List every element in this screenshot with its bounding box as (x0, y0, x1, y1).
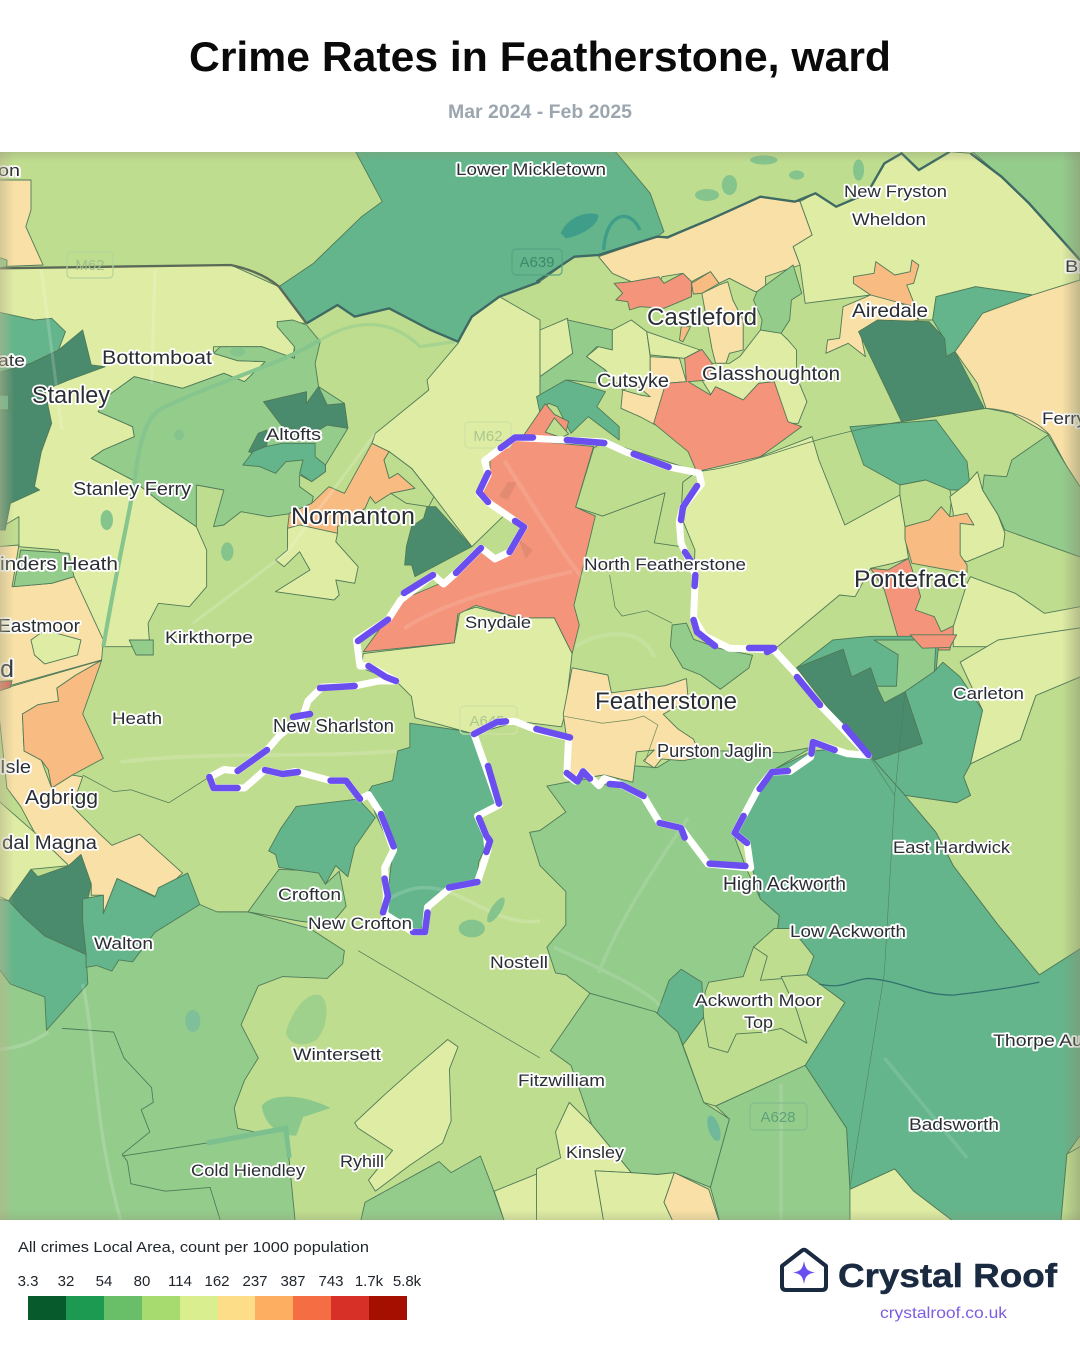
legend tick labels: 5.8k (393, 1273, 422, 1290)
place label: Agbrigg (25, 787, 98, 809)
legend tick labels: 743 (318, 1273, 344, 1290)
place label: Crofton (278, 885, 341, 904)
road shield: A628 (750, 1103, 807, 1130)
icon: house with sparkle (782, 1250, 826, 1290)
legend colour scale (28, 1296, 407, 1320)
road shield: M62 centre: M62 (473, 428, 503, 445)
place label: Ackworth Moor (695, 991, 822, 1010)
place label: Nostell (490, 953, 548, 972)
title: Crime Rates in Featherstone, ward (189, 33, 891, 80)
legend tick labels (18, 1273, 422, 1290)
place label: Wheldon (852, 210, 926, 229)
road shield: A639 (512, 249, 562, 275)
legend tick labels: 1.7k (355, 1273, 384, 1290)
place label: Fitzwilliam (518, 1071, 605, 1090)
place label: inders Heath (0, 554, 118, 574)
north-west map regions (0, 150, 664, 690)
place label: New Sharlston (273, 716, 394, 736)
place label: Stanley Ferry (73, 479, 191, 499)
road shield: M62 centre (465, 422, 511, 448)
north-east map regions (537, 150, 1080, 650)
place label: New Crofton (308, 914, 412, 933)
logo: Crystal Roof (782, 1250, 1058, 1322)
place label: New Fryston (844, 182, 947, 201)
legend title: All crimes Local Area, count per 1000 population (18, 1239, 369, 1256)
logo wordmark: Crystal Roof (838, 1257, 1058, 1294)
place label: Ryhill (340, 1152, 384, 1171)
south-east map regions (530, 625, 1080, 1232)
place label: East Hardwick (893, 838, 1011, 857)
place label: Top (744, 1013, 773, 1032)
place label: Isle (0, 757, 31, 777)
legend tick labels: 54 (96, 1273, 112, 1290)
place label: Snydale (465, 613, 531, 632)
place label: Cold Hiendley (191, 1161, 306, 1180)
place label: Eastmoor (0, 616, 80, 636)
legend tick labels: 237 (242, 1273, 268, 1290)
place label: Bottomboat (102, 348, 213, 369)
legend tick labels: 80 (134, 1273, 150, 1290)
logo url: crystalroof.co.uk (880, 1305, 1008, 1322)
place label: Wintersett (293, 1045, 381, 1064)
south-west map regions (0, 660, 551, 1232)
place label: Normanton (291, 503, 415, 530)
place label: Kinsley (566, 1143, 625, 1162)
road shield: A639: A639 (519, 254, 555, 271)
place label: Thorpe Au (993, 1031, 1080, 1050)
place label: dal Magna (2, 833, 97, 854)
map edge vignette (0, 152, 1080, 1220)
legend tick labels: 32 (58, 1273, 74, 1290)
place label: Stanley (32, 382, 110, 409)
road shield: A645: A645 (469, 713, 505, 730)
place label: Walton (94, 934, 153, 953)
place label: Purston Jaglin (657, 741, 772, 761)
place label: Badsworth (909, 1115, 999, 1134)
place label: Airedale (852, 301, 928, 322)
place label: North Featherstone (584, 555, 746, 574)
legend tick labels: 162 (204, 1273, 230, 1290)
place label: Glasshoughton (702, 364, 840, 385)
place label: Low Ackworth (790, 922, 906, 941)
subtitle: date range: Mar 2024 - Feb 2025 (448, 102, 632, 123)
place label: Kirkthorpe (165, 628, 253, 647)
place label: Heath (112, 709, 162, 728)
road shield: A645 (460, 706, 517, 734)
place label: Altofts (266, 425, 321, 444)
place label: Carleton (953, 684, 1024, 703)
legend (18, 1239, 422, 1320)
road shield: A628: A628 (760, 1109, 796, 1126)
place label: Featherstone (595, 688, 737, 715)
place label: Lower Mickletown (456, 160, 606, 179)
place label: Castleford (647, 304, 757, 331)
place label: Cutsyke (597, 371, 669, 392)
legend tick labels: 3.3 (18, 1273, 38, 1290)
place label: High Ackworth (723, 874, 846, 894)
legend tick labels: 387 (280, 1273, 306, 1290)
ward boundary: purple dashes (209, 438, 869, 932)
place label: Pontefract (854, 566, 966, 593)
road shield: M62 west: M62 (75, 257, 105, 274)
road shield: M62 west (67, 252, 113, 278)
Featherstone ward area (361, 404, 752, 782)
place label: d (0, 656, 14, 683)
ward boundary: white outline (210, 438, 869, 932)
legend tick labels: 114 (168, 1273, 192, 1290)
